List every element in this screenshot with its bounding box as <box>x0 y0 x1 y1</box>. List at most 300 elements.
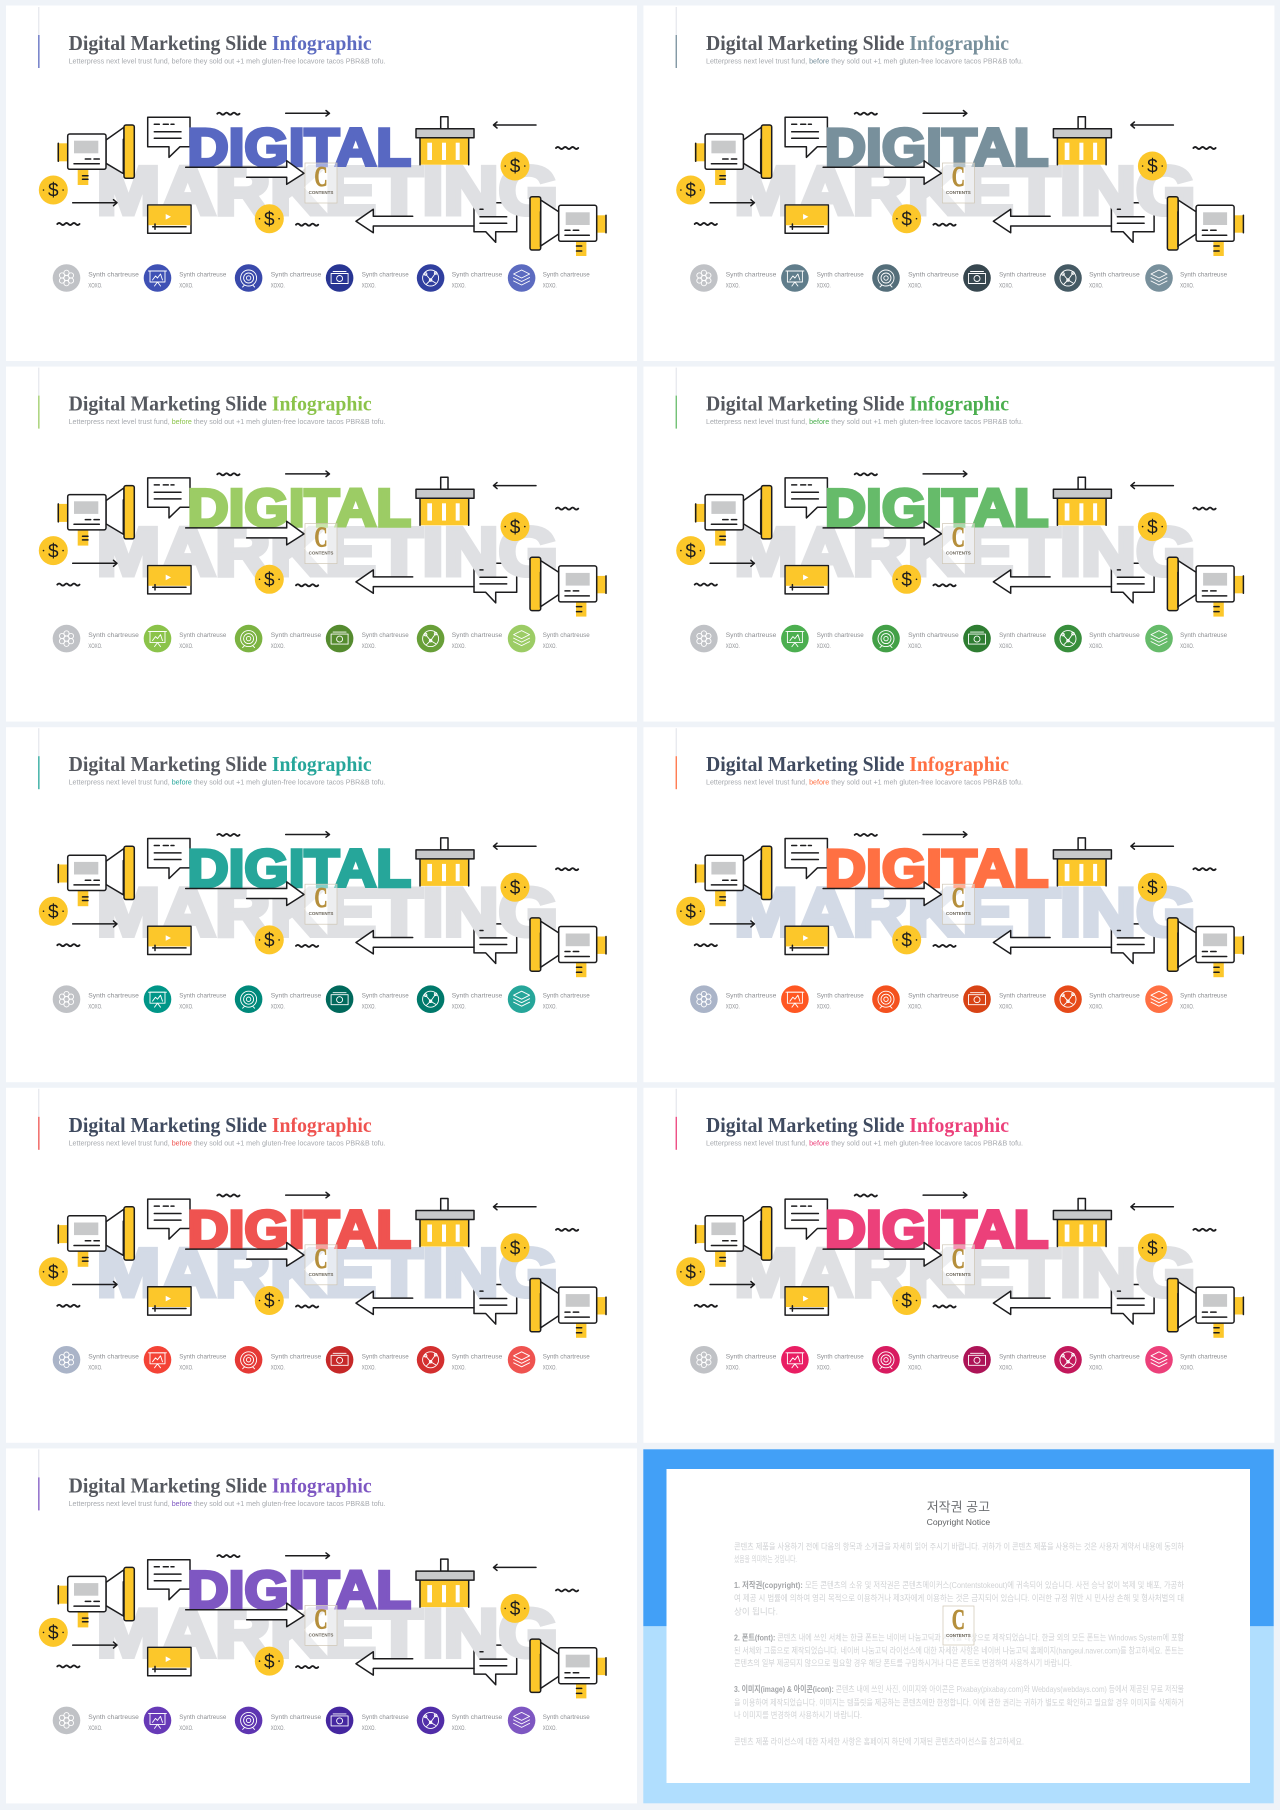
dollar signs: $ <box>1147 878 1158 899</box>
dollar signs <box>685 517 1158 591</box>
legend item 5: Synth chartreuse <box>1089 632 1140 639</box>
legend item 3: Synth chartreuse <box>271 1353 322 1360</box>
legend item 2: Synth chartreuse <box>817 272 864 278</box>
legend item 5 <box>417 985 503 1013</box>
legend item 3: Synth chartreuse <box>908 993 959 1000</box>
legend item 5: XOXO. <box>452 282 466 290</box>
watermark logo: CONTENTS <box>309 1632 333 1637</box>
watermark logo: CONTENTS <box>309 190 333 195</box>
legend row <box>53 985 590 1013</box>
legend item 1: XOXO. <box>88 1004 102 1011</box>
legend item 2: XOXO. <box>179 1004 193 1011</box>
legend item 1: Synth chartreuse <box>88 272 139 278</box>
legend item 2: Synth chartreuse <box>179 272 226 278</box>
legend item 6 <box>508 985 590 1013</box>
watermark logo <box>942 1244 974 1285</box>
watermark logo <box>305 1604 337 1645</box>
legend item 6: XOXO. <box>1180 643 1194 650</box>
notice body text: 셨음을 의미하는 것입니다. <box>734 1554 797 1564</box>
title: Digital Marketing Slide Infographic <box>706 392 1009 416</box>
accent line <box>676 728 677 789</box>
slide background <box>6 727 637 1082</box>
watermark logo <box>942 523 974 564</box>
legend item 2 <box>781 1346 864 1374</box>
legend item 2 <box>144 1346 226 1374</box>
legend item 4: Synth chartreuse <box>999 993 1046 1000</box>
dollar signs: $ <box>48 181 59 202</box>
legend item 6: Synth chartreuse <box>543 632 590 639</box>
legend row <box>690 1346 1227 1374</box>
legend item 6 <box>508 1346 590 1374</box>
dollar signs <box>685 157 1158 230</box>
dollar signs: $ <box>1147 517 1158 538</box>
legend item 6 <box>508 1707 590 1734</box>
dollar signs: $ <box>1147 157 1158 178</box>
legend item 3: Synth chartreuse <box>271 272 322 278</box>
title: Digital Marketing Slide Infographic <box>706 1113 1009 1137</box>
notice body text: 콘텐츠의 일부 제공되지 않으므로 필요할 경우 해당 폰트를 구입하시거나 다른 폰트로 변경하여 사용하시기 바랍니다. <box>734 1658 1072 1668</box>
dollar signs: $ <box>1147 1239 1158 1260</box>
watermark logo: CONTENTS <box>309 911 333 916</box>
legend item 1: XOXO. <box>726 1004 740 1011</box>
watermark logo: C <box>314 162 328 193</box>
notice body text: 된 서체와 그룹으로 제작되었습니다. 네이버 나눔고딕 라이선스에 대한 자세한 사항은 네이버 나눔고딕 홈페이지(hangeul.naver.com)를 참고하세요. 폰트는 <box>734 1646 1184 1656</box>
dollar signs <box>48 1238 521 1312</box>
legend item 4: Synth chartreuse <box>362 272 409 278</box>
legend item 6: XOXO. <box>543 1004 557 1011</box>
dollar signs: $ <box>901 570 912 591</box>
title: Digital Marketing Slide Infographic <box>69 1473 372 1497</box>
legend item 2: XOXO. <box>817 1364 831 1371</box>
legend item 4: XOXO. <box>362 1004 376 1011</box>
dollar signs: $ <box>264 570 275 591</box>
subtitle: Letterpress next level trust fund, before they sold out +1 meh gluten-free locavore tacos PBR&B tofu. <box>69 1138 386 1147</box>
watermark logo: C <box>952 162 965 193</box>
notice body text <box>734 1542 1184 1746</box>
legend item 3: Synth chartreuse <box>271 1714 322 1721</box>
legend item 3 <box>235 985 322 1013</box>
legend item 2 <box>144 1707 226 1734</box>
watermark logo: CONTENTS <box>946 190 971 195</box>
notice body text: 콘텐츠 제품을 사용하기 전에 다음의 항목과 소개글을 자세히 읽어 주시기 바랍니다. 귀하가 이 콘텐츠 제품을 사용하는 것은 사용자 계약서 내용에 동의하 <box>734 1542 1184 1552</box>
legend item 5: Synth chartreuse <box>452 272 503 278</box>
legend item 6: XOXO. <box>543 1725 557 1732</box>
word: MARKETING: MARKETING <box>97 874 558 950</box>
accent line <box>38 1449 40 1510</box>
watermark logo <box>942 883 974 924</box>
legend item 6: Synth chartreuse <box>1180 1353 1227 1360</box>
dollar signs: $ <box>48 1623 59 1644</box>
word: MARKETING: MARKETING <box>734 1235 1195 1311</box>
panel: blue-grey slide <box>643 6 1274 361</box>
illustration: megaphones, basket, arrows, video, coins <box>39 110 607 256</box>
slide background <box>643 367 1274 722</box>
legend item 1 <box>690 985 777 1013</box>
dollar signs <box>48 157 521 230</box>
legend item 2: Synth chartreuse <box>817 993 864 1000</box>
subtitle: Letterpress next level trust fund, before they sold out +1 meh gluten-free locavore tacos PBR&B tofu. <box>69 417 386 426</box>
legend item 6 <box>1145 264 1227 292</box>
legend item 1: Synth chartreuse <box>726 993 777 1000</box>
legend item 3: Synth chartreuse <box>271 993 322 1000</box>
legend item 2: XOXO. <box>179 643 193 650</box>
speech bubbles <box>785 478 1154 603</box>
legend item 2: Synth chartreuse <box>817 1353 864 1360</box>
legend item 3: XOXO. <box>908 643 922 650</box>
watermark logo: CONTENTS <box>309 551 333 556</box>
panel: light green slide <box>6 367 637 722</box>
watermark logo: C <box>952 1605 965 1636</box>
legend item 3 <box>235 1346 322 1374</box>
legend item 6: Synth chartreuse <box>543 993 590 1000</box>
legend item 1: XOXO. <box>726 282 740 290</box>
dollar signs: $ <box>264 1291 275 1312</box>
panel: orange slide <box>643 727 1274 1082</box>
legend item 4 <box>326 1346 409 1374</box>
legend item 3: XOXO. <box>271 643 285 650</box>
legend item 4 <box>326 625 409 652</box>
word: MARKETING: MARKETING <box>734 153 1195 229</box>
legend item 3: XOXO. <box>271 282 285 290</box>
notice body text: 1. 저작권(copyright): 모든 콘텐츠의 소유 및 저작권은 콘텐츠메이커스(Contentstokeout)에 귀속되어 있습니다. 사전 승낙 없이 복제 및 배포, 가공하 <box>734 1580 1184 1590</box>
legend item 6: XOXO. <box>1180 1004 1194 1011</box>
legend item 1 <box>53 985 139 1013</box>
legend item 2 <box>144 625 226 652</box>
legend item 1: XOXO. <box>726 1364 740 1371</box>
legend item 5: Synth chartreuse <box>1089 272 1140 278</box>
legend item 1: Synth chartreuse <box>88 632 139 639</box>
legend item 6: XOXO. <box>1180 282 1194 290</box>
speech bubbles <box>148 478 517 603</box>
legend item 1: Synth chartreuse <box>726 1353 777 1360</box>
notice body text: 2. 폰트(font): 콘텐츠 내에 쓰인 서체는 한글 폰트는 네이버 나눔고딕과 서체를 대상으로 제작되었습니다. 한글 외의 모든 폰트는 Windows System에 포함 <box>734 1632 1184 1642</box>
legend item 5 <box>1054 1346 1140 1374</box>
dollar signs <box>685 1238 1158 1312</box>
panel: indigo slide <box>6 6 637 361</box>
accent line <box>676 7 677 68</box>
legend item 1: Synth chartreuse <box>88 1353 139 1360</box>
slide background <box>6 367 637 722</box>
legend item 1 <box>53 1346 139 1374</box>
legend item 3 <box>872 264 959 292</box>
dollar signs <box>48 1599 521 1673</box>
watermark logo: CONTENTS <box>946 1272 971 1277</box>
notice subheading: Copyright Notice <box>927 1517 990 1527</box>
legend item 4: XOXO. <box>362 282 376 290</box>
dollar signs <box>48 517 521 591</box>
watermark logo: CONTENTS <box>946 551 971 556</box>
legend item 6 <box>508 625 590 652</box>
word: DIGITAL: DIGITAL <box>188 118 411 178</box>
blue background upper <box>643 1449 1274 1626</box>
legend item 3: XOXO. <box>908 282 922 290</box>
watermark logo: C <box>952 883 965 914</box>
subtitle: Letterpress next level trust fund, before they sold out +1 meh gluten-free locavore tacos PBR&B tofu. <box>706 417 1023 426</box>
illustration: megaphones, basket, arrows, video, coins <box>676 110 1244 256</box>
legend item 6: XOXO. <box>543 1364 557 1371</box>
legend item 4: Synth chartreuse <box>362 632 409 639</box>
legend item 3 <box>872 625 959 652</box>
legend item 3 <box>235 1707 322 1734</box>
dollar signs: $ <box>264 1652 275 1673</box>
subtitle: Letterpress next level trust fund, before they sold out +1 meh gluten-free locavore tacos PBR&B tofu. <box>706 778 1023 787</box>
legend item 5 <box>1054 264 1140 292</box>
legend row <box>690 625 1227 652</box>
legend item 3: XOXO. <box>908 1364 922 1371</box>
legend item 1 <box>690 1346 777 1374</box>
speech bubbles <box>148 1560 517 1685</box>
speech bubbles <box>148 1199 517 1324</box>
legend item 5 <box>417 264 503 292</box>
word: MARKETING: MARKETING <box>734 514 1195 590</box>
watermark logo: CONTENTS <box>946 911 971 916</box>
legend item 1 <box>53 1707 139 1734</box>
legend item 5: XOXO. <box>1089 1364 1103 1371</box>
legend row <box>690 985 1227 1013</box>
subtitle: Letterpress next level trust fund, before they sold out +1 meh gluten-free locavore tacos PBR&B tofu. <box>706 56 1023 66</box>
legend item 3 <box>235 625 322 652</box>
legend item 4 <box>963 264 1046 292</box>
word: DIGITAL: DIGITAL <box>188 479 411 538</box>
word: DIGITAL: DIGITAL <box>825 840 1048 899</box>
legend item 2 <box>144 264 226 292</box>
legend item 4 <box>326 264 409 292</box>
legend row <box>53 1346 590 1374</box>
legend item 6 <box>508 264 590 292</box>
legend item 1 <box>53 625 139 652</box>
word: MARKETING: MARKETING <box>97 514 558 590</box>
legend item 5 <box>417 1707 503 1734</box>
legend item 6 <box>1145 625 1227 652</box>
dollar signs: $ <box>264 931 275 952</box>
dollar signs: $ <box>901 1291 912 1312</box>
legend item 4: Synth chartreuse <box>362 1353 409 1360</box>
illustration: megaphones, basket, arrows, video, coins <box>676 1192 1244 1338</box>
legend item 2: Synth chartreuse <box>179 1353 226 1360</box>
watermark logo: C <box>314 523 328 554</box>
legend item 6 <box>1145 1346 1227 1374</box>
word: DIGITAL: DIGITAL <box>825 479 1048 538</box>
legend item 1: Synth chartreuse <box>726 632 777 639</box>
legend item 4: Synth chartreuse <box>362 993 409 1000</box>
dollar signs: $ <box>48 902 59 923</box>
legend item 5: XOXO. <box>452 1364 466 1371</box>
legend row <box>53 1707 590 1734</box>
legend item 3: Synth chartreuse <box>908 1353 959 1360</box>
legend item 3: XOXO. <box>271 1364 285 1371</box>
subtitle: Letterpress next level trust fund, before they sold out +1 meh gluten-free locavore tacos PBR&B tofu. <box>69 56 386 66</box>
dollar signs: $ <box>510 1239 521 1260</box>
legend item 3: XOXO. <box>271 1004 285 1011</box>
legend item 1: Synth chartreuse <box>726 272 777 278</box>
legend item 4 <box>963 985 1046 1013</box>
panel: copyright notice <box>643 1449 1274 1803</box>
legend item 6: XOXO. <box>543 643 557 650</box>
legend item 1: Synth chartreuse <box>88 993 139 1000</box>
word: DIGITAL: DIGITAL <box>188 1561 411 1620</box>
legend item 1: XOXO. <box>88 1364 102 1371</box>
legend item 5: XOXO. <box>452 1004 466 1011</box>
illustration: megaphones, basket, arrows, video, coins <box>39 832 607 977</box>
legend item 4: XOXO. <box>999 643 1013 650</box>
legend item 2: Synth chartreuse <box>817 632 864 639</box>
legend item 3: XOXO. <box>271 1725 285 1732</box>
legend item 2 <box>781 264 864 292</box>
legend item 4 <box>326 985 409 1013</box>
illustration: megaphones, basket, arrows, video, coins <box>39 1192 607 1338</box>
legend item 2 <box>781 625 864 652</box>
dollar signs: $ <box>901 209 912 230</box>
speech bubbles <box>785 838 1154 964</box>
watermark logo <box>942 162 974 203</box>
watermark logo: C <box>952 1244 965 1275</box>
subtitle: Letterpress next level trust fund, before they sold out +1 meh gluten-free locavore tacos PBR&B tofu. <box>69 778 386 787</box>
word: MARKETING: MARKETING <box>734 874 1195 950</box>
legend item 4: Synth chartreuse <box>999 272 1046 278</box>
legend item 5: XOXO. <box>452 1725 466 1732</box>
legend item 3: Synth chartreuse <box>271 632 322 639</box>
legend item 4 <box>326 1707 409 1734</box>
legend item 6: XOXO. <box>1180 1364 1194 1371</box>
legend item 2: Synth chartreuse <box>179 1714 226 1721</box>
watermark logo: CONTENTS <box>309 1272 333 1277</box>
dollar signs: $ <box>264 209 275 230</box>
dollar signs <box>48 878 521 952</box>
legend item 3 <box>235 264 322 292</box>
legend item 5: Synth chartreuse <box>452 993 503 1000</box>
legend item 2 <box>144 985 226 1013</box>
legend item 5: XOXO. <box>1089 282 1103 290</box>
legend item 3: Synth chartreuse <box>908 632 959 639</box>
accent line <box>676 368 677 429</box>
illustration: megaphones, basket, arrows, video, coins <box>39 471 607 617</box>
legend item 4: Synth chartreuse <box>999 1353 1046 1360</box>
word: DIGITAL: DIGITAL <box>188 840 411 899</box>
dollar signs: $ <box>901 931 912 952</box>
legend item 1: XOXO. <box>88 282 102 290</box>
legend item 5: Synth chartreuse <box>1089 993 1140 1000</box>
legend item 2: Synth chartreuse <box>179 993 226 1000</box>
legend item 1: XOXO. <box>88 1725 102 1732</box>
watermark logo <box>305 523 337 564</box>
watermark logo: C <box>314 883 328 914</box>
legend item 2: XOXO. <box>179 282 193 290</box>
legend item 2: XOXO. <box>817 643 831 650</box>
notice body text: 콘텐츠 제품 라이선스에 대한 자세한 사항은 홈페이지 하단에 기재된 콘텐츠라이선스를 참고하세요. <box>734 1736 1024 1746</box>
legend item 1 <box>690 625 777 652</box>
subtitle: Letterpress next level trust fund, before they sold out +1 meh gluten-free locavore tacos PBR&B tofu. <box>69 1499 386 1508</box>
dollar signs: $ <box>510 157 521 178</box>
watermark logo <box>305 162 337 203</box>
legend item 6: Synth chartreuse <box>543 1353 590 1360</box>
notice body text: 을 이용하여 제작되었습니다. 이미지는 템플릿을 제공하는 콘텐츠에만 한정합니다. 이에 관한 권리는 귀하가 별도로 확인하고 필요할 경우 이미지를 삭제하거 <box>734 1698 1184 1708</box>
legend item 1: XOXO. <box>88 643 102 650</box>
legend row <box>690 264 1227 292</box>
watermark logo <box>943 1605 974 1645</box>
legend item 6: Synth chartreuse <box>543 1714 590 1721</box>
slide background <box>643 1088 1274 1443</box>
word: MARKETING: MARKETING <box>97 1235 558 1311</box>
speech bubbles <box>785 117 1154 242</box>
legend item 5 <box>1054 625 1140 652</box>
legend item 4 <box>963 625 1046 652</box>
legend row <box>53 264 590 292</box>
legend item 6: XOXO. <box>543 282 557 290</box>
illustration: megaphones, basket, arrows, video, coins <box>676 832 1244 977</box>
dollar signs: $ <box>510 1599 521 1620</box>
dollar signs: $ <box>685 541 696 562</box>
legend item 5: XOXO. <box>452 643 466 650</box>
legend item 4: XOXO. <box>362 1725 376 1732</box>
notice body text: 3. 이미지(image) & 아이콘(icon): 콘텐츠 내에 쓰인 사진, 이미지와 아이콘은 Pixabay(pixabay.com)와 Webdays(webdays.com) 등에서 제공된 무료 저작물 <box>734 1684 1184 1694</box>
dollar signs: $ <box>510 878 521 899</box>
accent line <box>38 368 40 429</box>
legend item 1 <box>690 264 777 292</box>
legend item 5 <box>1054 985 1140 1013</box>
legend item 5 <box>417 625 503 652</box>
word: MARKETING: MARKETING <box>97 153 558 229</box>
legend item 4: XOXO. <box>999 282 1013 290</box>
slide background <box>6 1088 637 1443</box>
watermark logo: C <box>314 1244 328 1275</box>
dollar signs: $ <box>685 1263 696 1284</box>
dollar signs: $ <box>48 1263 59 1284</box>
title: Digital Marketing Slide Infographic <box>706 752 1009 776</box>
legend item 4: XOXO. <box>999 1364 1013 1371</box>
dollar signs: $ <box>510 517 521 538</box>
accent line <box>38 1089 40 1150</box>
legend item 5: XOXO. <box>1089 1004 1103 1011</box>
legend item 6: Synth chartreuse <box>1180 993 1227 1000</box>
panel: pink slide <box>643 1088 1274 1443</box>
legend item 4 <box>963 1346 1046 1374</box>
watermark logo: C <box>314 1604 328 1635</box>
illustration: megaphones, basket, arrows, video, coins <box>676 471 1244 617</box>
speech bubbles <box>785 1199 1154 1324</box>
legend item 5: Synth chartreuse <box>452 1353 503 1360</box>
legend item 1 <box>53 264 139 292</box>
illustration: megaphones, basket, arrows, video, coins <box>39 1553 607 1698</box>
accent line <box>676 1089 677 1150</box>
slide background <box>643 6 1274 361</box>
legend item 4: XOXO. <box>362 1364 376 1371</box>
legend item 6 <box>1145 985 1227 1013</box>
title: Digital Marketing Slide Infographic <box>69 392 372 416</box>
legend item 2: Synth chartreuse <box>179 632 226 639</box>
legend item 2 <box>781 985 864 1013</box>
legend item 1: XOXO. <box>726 643 740 650</box>
legend item 5: Synth chartreuse <box>452 1714 503 1721</box>
legend item 3 <box>872 1346 959 1374</box>
word: DIGITAL: DIGITAL <box>825 1200 1048 1259</box>
slide background <box>643 727 1274 1082</box>
title: Digital Marketing Slide Infographic <box>706 31 1009 55</box>
notice body text: 상이 됩니다. <box>734 1606 778 1616</box>
accent line <box>38 728 40 789</box>
dollar signs: $ <box>685 902 696 923</box>
blue background lower <box>643 1626 1274 1803</box>
legend item 2: XOXO. <box>179 1364 193 1371</box>
word: DIGITAL: DIGITAL <box>825 118 1048 178</box>
legend item 6: Synth chartreuse <box>1180 632 1227 639</box>
legend item 4: Synth chartreuse <box>999 632 1046 639</box>
notice body text: 나 이미지를 변경하여 사용하시기 바랍니다. <box>734 1710 862 1720</box>
legend item 3: Synth chartreuse <box>908 272 959 278</box>
legend item 4: XOXO. <box>362 643 376 650</box>
watermark logo: C <box>952 523 965 554</box>
legend item 2: XOXO. <box>817 1004 831 1011</box>
dollar signs <box>685 878 1158 952</box>
